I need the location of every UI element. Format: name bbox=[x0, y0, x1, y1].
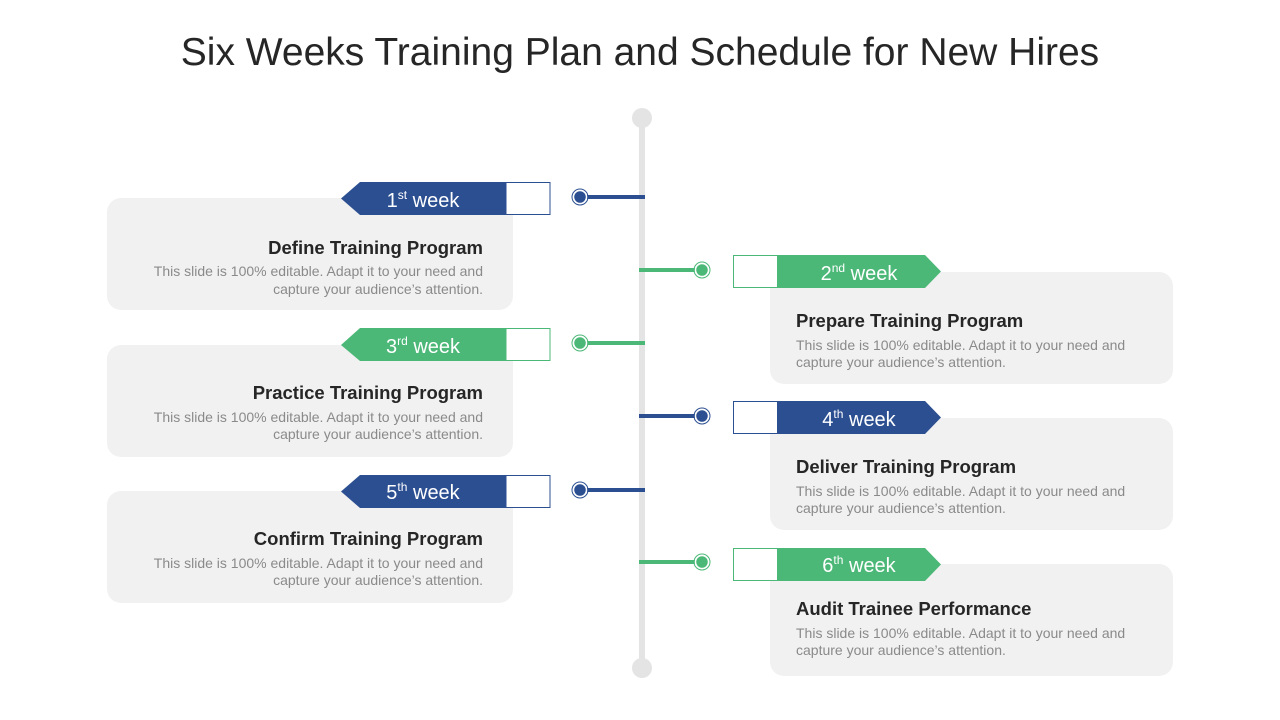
panel: week 1: This slide is 100% editable. Adapt it to your need and bbox=[154, 263, 483, 279]
panel: week 3: Practice Training Program bbox=[253, 382, 483, 403]
panel: week 3 bbox=[107, 328, 645, 457]
panel: week 3: rd bbox=[397, 334, 408, 348]
panel: week 1 bbox=[107, 182, 645, 310]
panel: week 5: Confirm Training Program bbox=[254, 528, 483, 549]
panel: week 5: week bbox=[407, 482, 461, 504]
panel: week 4 bbox=[639, 401, 1173, 530]
panel: week 2: Prepare Training Program bbox=[796, 310, 1023, 331]
panel: week 4: This slide is 100% editable. Adapt it to your need and bbox=[796, 483, 1125, 499]
panel: week 6: Audit Trainee Performance bbox=[796, 598, 1031, 619]
panel: week 3: week bbox=[408, 336, 461, 358]
panel: week 1: st bbox=[398, 188, 408, 202]
panel: week 1: Define Training Program bbox=[268, 237, 483, 258]
panel: week 2: 2 bbox=[821, 263, 832, 285]
panel: week 2: This slide is 100% editable. Adapt it to your need and bbox=[796, 337, 1125, 353]
panel: week 5: th bbox=[397, 480, 407, 494]
panel: week 6: 6 bbox=[822, 555, 833, 577]
panel: week 1: capture your audience’s attention. bbox=[273, 281, 483, 297]
panel: week 2: capture your audience’s attention. bbox=[796, 354, 1006, 370]
panel: week 3: capture your audience’s attention. bbox=[273, 426, 483, 442]
panel: week 1: week bbox=[407, 190, 460, 212]
panel: week 2: week bbox=[845, 263, 898, 285]
panel: week 5: This slide is 100% editable. Adapt it to your need and bbox=[154, 555, 483, 571]
panel: week 6 bbox=[639, 548, 1173, 676]
panel: week 3: This slide is 100% editable. Adapt it to your need and bbox=[154, 409, 483, 425]
panel: week 6: week bbox=[843, 555, 897, 577]
panel: week 6: This slide is 100% editable. Adapt it to your need and bbox=[796, 625, 1125, 641]
panel: week 3: 3 bbox=[386, 336, 397, 358]
panel: week 4: Deliver Training Program bbox=[796, 456, 1016, 477]
panel: week 4: 4 bbox=[822, 409, 833, 431]
panel: week 6: th bbox=[833, 553, 843, 567]
timeline bbox=[632, 108, 652, 678]
panel: week 5: capture your audience’s attention. bbox=[273, 572, 483, 588]
panel: week 1: 1 bbox=[387, 190, 398, 212]
title: Six Weeks Training Plan and Schedule for New Hires bbox=[181, 31, 1099, 74]
panel: week 4: capture your audience’s attention. bbox=[796, 500, 1006, 516]
panel: week 6: capture your audience’s attention. bbox=[796, 642, 1006, 658]
panel: week 4: week bbox=[843, 409, 897, 431]
panel: week 5: 5 bbox=[386, 482, 397, 504]
panel: week 5 bbox=[107, 475, 645, 603]
panel: week 2 bbox=[639, 255, 1173, 384]
panel: week 4: th bbox=[833, 407, 843, 421]
panel: week 2: nd bbox=[832, 261, 845, 275]
